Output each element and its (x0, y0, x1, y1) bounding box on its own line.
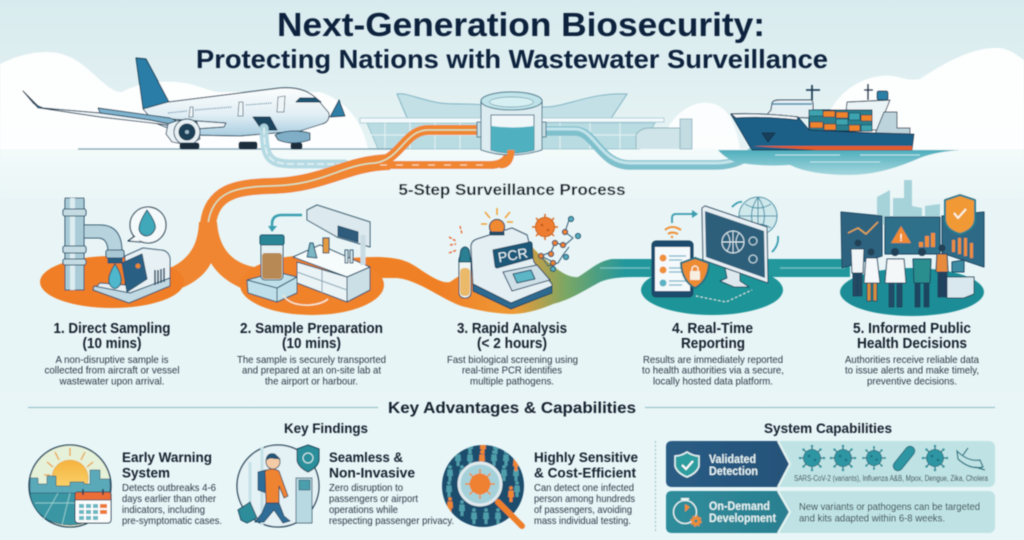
highly sensitive text: Can detect one infected (534, 483, 634, 494)
step 2 text: (10 mins) (282, 336, 341, 352)
step 2 icon: sample jar and lab bench (247, 205, 370, 305)
panel: on-demand development: and kits adapted within 6-8 weeks. (799, 514, 945, 524)
five-step surveillance heading: 5-Step Surveillance Process (398, 182, 626, 199)
step 3 text: Fast biological screening using (447, 355, 578, 366)
step 3 text: 3. Rapid Analysis (457, 321, 567, 337)
step 5 icon: dashboards, skyline, shield and officials: ! (899, 233, 903, 244)
step 3 icon: PCR machine with tube, virus and molecule (449, 208, 580, 309)
step 4 text: Results are immediately reported (643, 355, 783, 366)
system capabilities heading: System Capabilities (764, 421, 892, 436)
title: Protecting Nations with Wastewater Surveillance (196, 44, 828, 74)
airplane (23, 58, 400, 149)
icon: walking passenger with shield (237, 445, 319, 527)
seamless text: respecting passenger privacy. (329, 516, 454, 527)
highly sensitive text: Highly Sensitive (534, 449, 638, 465)
step 5 text: preventive decisions. (867, 376, 957, 388)
title: Next-Generation Biosecurity: (277, 6, 765, 43)
step 4 text: 4. Real-Time (672, 321, 753, 337)
airport terminal (360, 94, 692, 149)
panel: on-demand development: On-Demand (709, 499, 770, 513)
early warning text: Detects outbreaks 4-6 (122, 483, 216, 494)
step 5 icon: dashboards, skyline, shield and officials (841, 180, 984, 307)
panel: on-demand development: Development (709, 511, 776, 525)
icon: stopwatch and gear (674, 499, 700, 526)
step 2 text: The sample is securely transported (237, 355, 386, 366)
seamless text: operations while (329, 505, 398, 516)
step 4 text: locally hosted data platform. (653, 376, 773, 388)
step 4 text: to health authorities via a secure, (642, 366, 784, 376)
panel: on-demand development (666, 491, 995, 533)
step 1 text (44, 321, 180, 388)
step 3 text: multiple pathogens. (470, 376, 554, 388)
step 5 text (845, 321, 979, 388)
seamless text: Non-Invasive (329, 464, 415, 480)
highly sensitive text (534, 449, 638, 527)
step 1 text: A non-disruptive sample is (56, 355, 168, 366)
highly sensitive text: of passengers, avoiding (534, 505, 632, 516)
process ribbon and step platforms (40, 222, 984, 316)
ship and sea (718, 84, 960, 175)
icon: crowd under magnifying glass with virus (442, 438, 524, 527)
step 4 text (642, 321, 784, 388)
panel: on-demand development: New variants or pathogens can be targeted (799, 502, 980, 513)
step 2 text: the airport or harbour. (265, 376, 358, 388)
step 5 text: to issue alerts and make timely, (845, 366, 979, 376)
highly sensitive text: mass individual testing. (534, 516, 631, 527)
pathogen icons (799, 445, 985, 471)
panel: validated detection (666, 441, 995, 487)
icon: sunrise over city with calendar (29, 445, 111, 527)
highly sensitive text: & Cost-Efficient (534, 464, 636, 480)
step 4 text: Reporting (681, 336, 745, 352)
step 5 text: 5. Informed Public (853, 321, 971, 337)
key advantages heading with rules: Key Advantages & Capabilities (388, 400, 636, 417)
seamless text: Zero disruption to (329, 483, 403, 494)
early warning text (122, 449, 222, 527)
early warning text: Early Warning (122, 449, 212, 465)
orange inflow pipes (208, 130, 510, 224)
step 3 text: (< 2 hours) (477, 336, 547, 352)
step 3 text: real-time PCR identifies (462, 366, 562, 376)
water pipes (264, 128, 768, 165)
title (196, 6, 828, 74)
panel: validated detection: Detection (709, 464, 758, 478)
step 2 text: 2. Sample Preparation (240, 321, 383, 337)
step 3 text (447, 321, 578, 388)
seamless text: passengers or airport (329, 494, 418, 505)
step 5 text: Health Decisions (857, 336, 967, 352)
step 2 text (237, 321, 386, 388)
early warning text: indicators, including (122, 505, 205, 516)
early warning text: System (122, 464, 170, 480)
central water tank (477, 92, 546, 165)
step 4 icon: tablet, shield, monitor and globe (652, 197, 778, 302)
seamless text (329, 449, 454, 527)
highly sensitive text: person among hundreds (534, 494, 635, 505)
step 5 text: Authorities receive reliable data (845, 355, 979, 366)
step 1 text: collected from aircraft or vessel (44, 366, 180, 376)
step 1 icon: pipe and sampler (63, 198, 170, 303)
icon: shield with check (675, 452, 699, 477)
early warning text: days earlier than other (122, 494, 217, 505)
early warning text: pre-symptomatic cases. (122, 516, 222, 527)
step 1 text: wastewater upon arrival. (59, 376, 164, 388)
step 1 text: 1. Direct Sampling (54, 321, 170, 337)
panel: validated detection: Validated (709, 452, 756, 466)
step 2 text: and prepared at an on-site lab at (242, 366, 381, 376)
background: clouds and horizon (0, 48, 1024, 199)
step 3 icon: PCR machine with tube, virus and molecule: PCR (497, 245, 529, 265)
key findings heading: Key Findings (284, 421, 368, 436)
step 1 text: (10 mins) (82, 336, 142, 352)
seamless text: Seamless & (329, 449, 403, 465)
